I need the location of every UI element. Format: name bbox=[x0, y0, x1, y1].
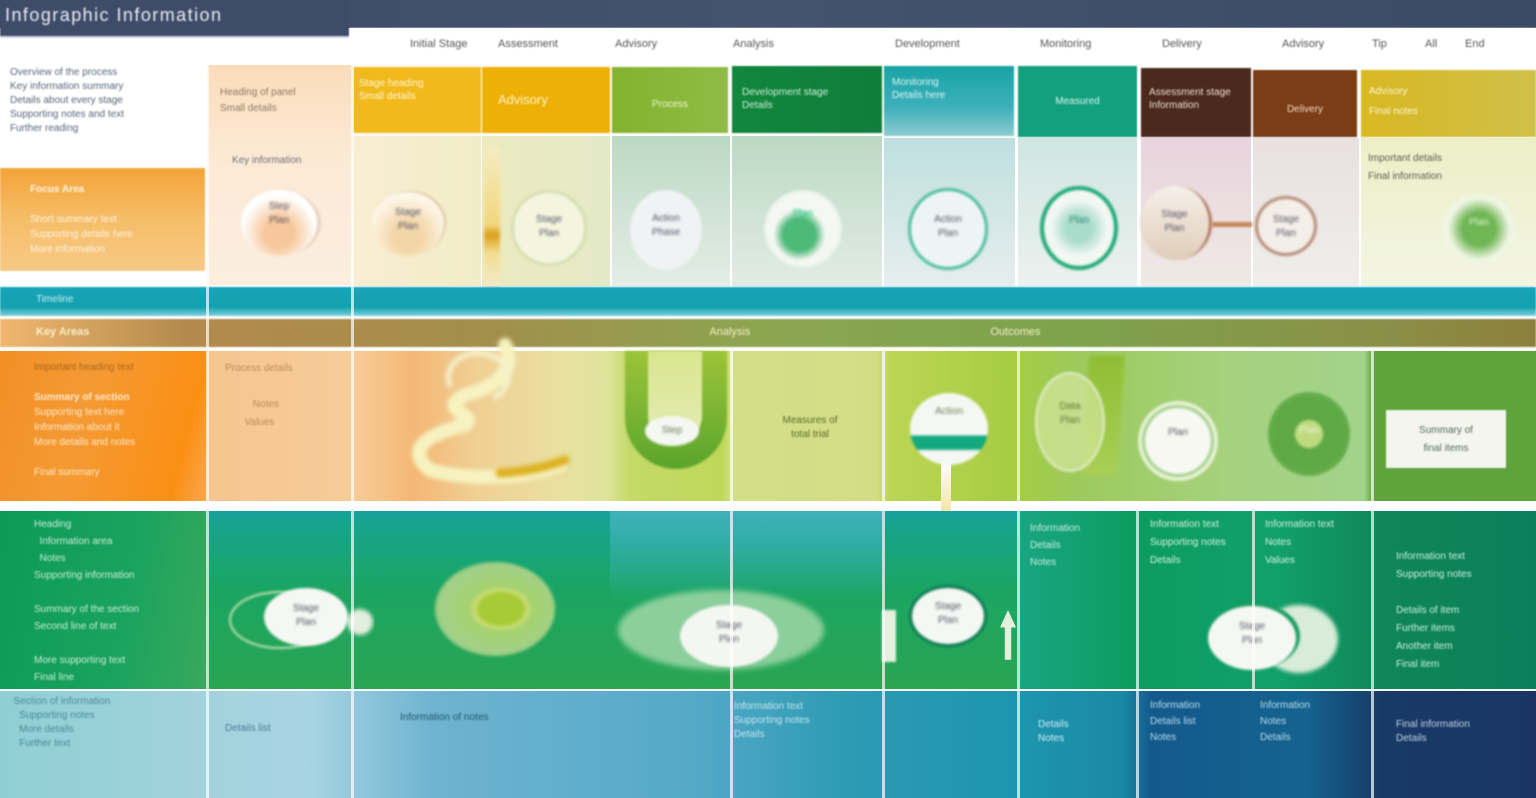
circle: 3 bbox=[511, 190, 587, 266]
graphic: swirl left bbox=[227, 589, 375, 651]
column headings: Initial Stage bbox=[410, 38, 467, 50]
circle: 7 bbox=[1040, 186, 1118, 270]
text: row 5 column 3: Information of notes bbox=[400, 712, 488, 723]
text: center note: Measures of bbox=[782, 415, 838, 426]
text: right column: Process details bbox=[225, 363, 293, 374]
text: right column bbox=[225, 363, 293, 428]
ring: 1040: Plan bbox=[1060, 415, 1080, 426]
cell: yellow header 2 bbox=[482, 67, 610, 133]
cell: teal header: Monitoring bbox=[892, 77, 939, 88]
row 4 right bbox=[1018, 511, 1536, 689]
circle: 9: Plan bbox=[1276, 228, 1296, 239]
text: row 5 column 7: Notes bbox=[1038, 733, 1064, 744]
column headings: Delivery bbox=[1162, 38, 1202, 50]
text: row 5 column 9: Notes bbox=[1260, 716, 1286, 727]
column headings: Advisory bbox=[1282, 38, 1324, 50]
cell: yellow header 1 bbox=[353, 67, 481, 133]
panel: intro text bbox=[0, 40, 207, 168]
circle: 10 bbox=[1442, 194, 1516, 264]
panel: orange callout: Short summary text bbox=[30, 214, 117, 225]
text: right column 2: Information text bbox=[1150, 519, 1219, 530]
panel: orange callout bbox=[0, 168, 205, 271]
circle: row 4 - 2: Stage bbox=[716, 620, 742, 631]
cell: dark brown header: Assessment stage bbox=[1149, 87, 1231, 98]
row 1 pale bodies bbox=[353, 136, 481, 286]
circle: row 4 - 3: Stage bbox=[935, 601, 961, 612]
bar: white left bbox=[882, 610, 896, 662]
cell: emerald header: Measured bbox=[1055, 96, 1100, 107]
cell: dark green header bbox=[732, 66, 882, 133]
circle: 1 bbox=[241, 190, 317, 256]
circle: 1: Plan bbox=[269, 215, 289, 226]
text: right column 3: Notes bbox=[1265, 537, 1291, 548]
cell: green header 1: Process bbox=[652, 99, 688, 110]
panel: orange text: Summary of section bbox=[34, 392, 130, 403]
circle: 4: Phase bbox=[652, 227, 680, 238]
column headings: Development bbox=[895, 38, 960, 50]
text: row 5 column 8: Information bbox=[1150, 700, 1200, 711]
text: right column 3: Values bbox=[1265, 555, 1295, 566]
callout: white box bbox=[1386, 410, 1506, 468]
text: row 5 column 8: Details list bbox=[1150, 716, 1196, 727]
column headings: Advisory bbox=[615, 38, 657, 50]
text: row 5 column 5: Details bbox=[734, 729, 765, 740]
panel: orange text: Supporting text here bbox=[34, 407, 124, 418]
cell: yellow header 2: Advisory bbox=[498, 92, 548, 107]
text: row 5 column 8 bbox=[1150, 700, 1200, 743]
text: right column 4: Another item bbox=[1396, 641, 1453, 652]
text: right column 1: Details bbox=[1030, 540, 1061, 551]
text: right column 1 bbox=[1030, 522, 1080, 568]
text: row 5 left: Supporting notes bbox=[19, 710, 95, 721]
circle: 8: Plan bbox=[1164, 223, 1184, 234]
circle: 8 bbox=[1140, 186, 1212, 260]
graphic: green U shape bbox=[625, 351, 727, 469]
column headings: End bbox=[1465, 38, 1485, 50]
text: row 5 left: Section of information bbox=[14, 696, 110, 707]
circle: row 4 - 4: Stage bbox=[1239, 621, 1265, 632]
panel label 1 bbox=[220, 86, 296, 114]
circle: row 4 - 2: Plan bbox=[719, 634, 739, 645]
text: row 5 column 5 bbox=[734, 700, 810, 740]
graphic: melon bbox=[435, 562, 555, 656]
ring: 1040 bbox=[1035, 372, 1105, 472]
panel: intro text: Details about every stage bbox=[10, 95, 123, 106]
text: row 5 left: More details bbox=[19, 724, 74, 735]
row 5 backdrop bbox=[0, 691, 1536, 798]
callout: white box: final items bbox=[1423, 443, 1468, 454]
row 4 backdrop bbox=[0, 511, 1536, 689]
text: right column 4 bbox=[1395, 550, 1472, 670]
circle: 6 bbox=[908, 188, 988, 270]
circle: 5 bbox=[764, 190, 842, 268]
circle: green badge: Step bbox=[662, 425, 682, 436]
row 3 backdrop bbox=[0, 351, 1536, 501]
text: right panel note bbox=[1368, 152, 1442, 182]
circle: row 4 - 1: Plan bbox=[296, 617, 316, 628]
circle: 7: Plan bbox=[1069, 215, 1089, 226]
text: row 5 right bbox=[1396, 718, 1470, 744]
stem: pin bbox=[941, 460, 951, 512]
cell: yellow header 1: Stage heading bbox=[359, 78, 424, 89]
text: right column 4: Information text bbox=[1396, 551, 1465, 562]
circle: 5: Plan bbox=[793, 208, 813, 219]
circle: 4 bbox=[630, 190, 702, 270]
cell: olive header: Advisory bbox=[1369, 86, 1407, 97]
cell: dark green header: Development stage bbox=[742, 87, 828, 98]
text: right column 1: Notes bbox=[1030, 557, 1056, 568]
circle: 2: Plan bbox=[398, 221, 418, 232]
circle: row 4 - 1 bbox=[264, 588, 348, 646]
cell: olive header bbox=[1361, 70, 1536, 137]
text: center note bbox=[782, 414, 838, 440]
cell: emerald header bbox=[1018, 66, 1137, 137]
text: row 4 left: More supporting text bbox=[34, 655, 125, 666]
panel: orange text: Information about it bbox=[34, 422, 120, 433]
panel: orange text bbox=[34, 362, 136, 478]
panel: orange text: Important heading text bbox=[34, 362, 134, 373]
title bbox=[0, 0, 349, 38]
column headings: Tip bbox=[1372, 38, 1387, 50]
text: right column 4: Further items bbox=[1396, 623, 1455, 634]
title: Infographic Information bbox=[5, 5, 222, 25]
text: row 5 left: Further text bbox=[19, 738, 70, 749]
panel: orange callout: More information bbox=[30, 244, 105, 255]
circle: green bbox=[1268, 392, 1350, 476]
panel: intro text: Further reading bbox=[10, 123, 78, 134]
callout: white box: Summary of bbox=[1419, 425, 1473, 436]
cell: dark brown header: Information bbox=[1149, 100, 1199, 111]
column headings: Assessment bbox=[498, 38, 558, 50]
text: row 4 left: Notes bbox=[40, 553, 66, 564]
text: row 5 column 7: Details bbox=[1038, 719, 1069, 730]
text: right panel note: Important details bbox=[1368, 153, 1442, 164]
panel: intro text: Supporting notes and text bbox=[10, 109, 124, 120]
graphic: leaf shape bbox=[618, 590, 824, 670]
circle: 9 bbox=[1255, 196, 1317, 256]
text: row 4 left: Supporting information bbox=[34, 570, 135, 581]
text: right column: Values bbox=[244, 417, 274, 428]
row 4 teal patch bbox=[610, 511, 882, 601]
text: row 5 column 7 bbox=[1038, 718, 1070, 744]
ring: 1040: Data bbox=[1059, 401, 1081, 412]
text: right column 2 bbox=[1150, 518, 1226, 566]
olive band: Key Areas Analysis Outcomes bbox=[36, 326, 1041, 338]
cell: teal header bbox=[884, 66, 1014, 136]
row 1 header cells bbox=[207, 65, 353, 285]
circle: 3: Stage bbox=[536, 214, 562, 225]
teal band bbox=[0, 287, 1536, 316]
text: right column 2: Supporting notes bbox=[1150, 537, 1226, 548]
cell: teal header: Details here bbox=[892, 90, 945, 101]
column headings bbox=[350, 28, 1536, 65]
panel: orange callout: Supporting details here bbox=[30, 229, 133, 240]
text: row 5 column 2: Details list bbox=[225, 723, 271, 734]
olive band bbox=[0, 319, 1536, 347]
circle: pin: Action bbox=[935, 406, 963, 417]
text: row 4 left: Heading bbox=[34, 519, 71, 530]
text: row 5 column 8: Notes bbox=[1150, 732, 1176, 743]
text: right column 3: Information text bbox=[1265, 519, 1334, 530]
circle: row 4 - 4 bbox=[1208, 606, 1296, 670]
arrow: white up bbox=[1000, 610, 1016, 660]
circle: row 4 - 3 bbox=[912, 588, 984, 644]
circle: 4: Action bbox=[652, 213, 680, 224]
circle: green: Plan bbox=[1299, 425, 1319, 436]
circle: white lime bbox=[1145, 408, 1211, 474]
circle: 6: Plan bbox=[938, 228, 958, 239]
text: center note: total trial bbox=[791, 429, 829, 440]
icon: vertical marker bbox=[484, 148, 500, 288]
text: row 5 right: Details bbox=[1396, 733, 1427, 744]
column headings: Analysis bbox=[733, 38, 774, 50]
column headings: All bbox=[1425, 38, 1437, 50]
bar: green vertical bbox=[1081, 355, 1125, 475]
circle: 2 bbox=[372, 192, 444, 256]
text: right column 4: Details of item bbox=[1396, 605, 1459, 616]
circle: white lime: Plan bbox=[1168, 427, 1188, 438]
panel: orange callout: Focus Area bbox=[30, 184, 84, 195]
text: row 4 left bbox=[34, 518, 140, 681]
circle: 1: Step bbox=[269, 201, 289, 212]
circle: pin bbox=[910, 393, 988, 465]
arrow: circle 8 to 9 bbox=[1212, 222, 1252, 227]
circle: green badge bbox=[645, 416, 699, 446]
text: right column 1: Information bbox=[1030, 523, 1080, 534]
panel: intro text: Overview of the process bbox=[10, 67, 117, 78]
cell: dark brown header bbox=[1141, 68, 1251, 137]
header bar bbox=[0, 0, 1536, 28]
text: right column 2: Details bbox=[1150, 555, 1181, 566]
cell: brown header: Delivery bbox=[1287, 104, 1323, 115]
text: row 4 left: Summary of the section bbox=[34, 604, 139, 615]
circle: row 4 - 3: Plan bbox=[938, 615, 958, 626]
cell: brown header bbox=[1253, 70, 1357, 137]
text: row 5 right: Final information bbox=[1396, 719, 1470, 730]
text: right column: Notes bbox=[253, 399, 279, 410]
panel label 2: Key information bbox=[232, 155, 301, 166]
column headings: Monitoring bbox=[1040, 38, 1091, 50]
text: right panel note: Final information bbox=[1368, 171, 1442, 182]
circle: 6: Action bbox=[934, 214, 962, 225]
circle: 10: Plan bbox=[1469, 217, 1489, 228]
text: right column 3 bbox=[1264, 518, 1334, 566]
panel: intro text: Key information summary bbox=[10, 81, 123, 92]
panel label 1: Small details bbox=[220, 103, 277, 114]
text: right column 4: Final item bbox=[1396, 659, 1439, 670]
cell: olive header: Final notes bbox=[1369, 106, 1418, 117]
panel: orange left bbox=[0, 351, 207, 501]
circle: 8: Stage bbox=[1161, 209, 1188, 220]
text: row 5 column 9 bbox=[1260, 700, 1310, 743]
panel: orange text: More details and notes bbox=[34, 437, 135, 448]
text: row 5 column 9: Details bbox=[1260, 732, 1291, 743]
text: row 4 left: Second line of text bbox=[34, 621, 116, 632]
graphic: swirl bbox=[410, 335, 572, 486]
circle: row 4 - 1: Stage bbox=[293, 603, 319, 614]
row 4 left bbox=[0, 511, 207, 689]
text: row 4 left: Information area bbox=[40, 536, 112, 547]
cell: green header 1 bbox=[612, 67, 728, 133]
graphic: inner U bbox=[648, 351, 702, 443]
circle: 3: Plan bbox=[539, 228, 559, 239]
circle: row 4 - 2 bbox=[680, 605, 778, 667]
text: row 5 column 9: Information bbox=[1260, 700, 1310, 711]
cell: yellow header 1: Small details bbox=[359, 91, 416, 102]
cell: dark green header: Details bbox=[742, 100, 773, 111]
circle: 9: Stage bbox=[1273, 214, 1299, 225]
text: row 5 column 5: Information text bbox=[734, 701, 803, 712]
text: right column 4: Supporting notes bbox=[1396, 569, 1472, 580]
teal band: Timeline bbox=[36, 294, 73, 305]
circle: row 4 - 4: Plan bbox=[1242, 635, 1262, 646]
text: row 5 column 5: Supporting notes bbox=[734, 715, 810, 726]
circle: 2: Stage bbox=[395, 207, 421, 218]
panel label 1: Heading of panel bbox=[220, 87, 296, 98]
text: row 5 left bbox=[14, 696, 110, 749]
panel: orange text: Final summary bbox=[34, 467, 100, 478]
graphic: big blob bbox=[1260, 605, 1338, 673]
